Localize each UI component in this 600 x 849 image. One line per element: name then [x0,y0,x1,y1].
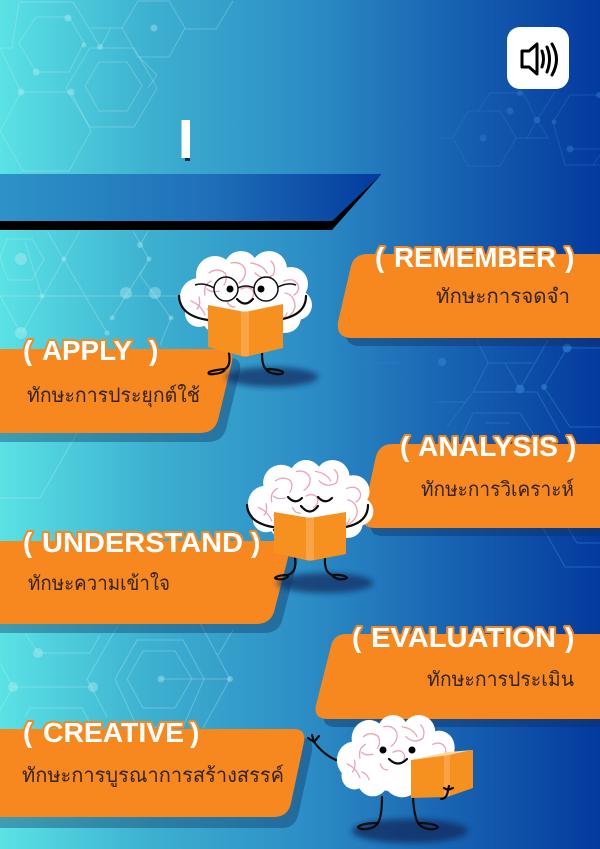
description: creative: ทักษะการบูรณาการสร้างสรรค์ [22,764,284,788]
heading: understand: UNDERSTAND [42,527,243,558]
description: evaluation: ทักษะการประเมิน [427,669,574,691]
heading: analysis: ) [567,431,576,462]
heading: analysis: ANALYSIS [418,431,558,462]
heading: remember: REMEMBER [394,242,556,273]
title band [0,174,382,230]
title cursor [182,120,190,161]
hexagon pattern: right middle [340,340,600,567]
panel: remember [338,254,600,346]
panel: evaluation [316,634,600,727]
heading: analysis: ( [400,431,410,462]
heading: apply: APPLY [42,335,132,366]
panel: creative [0,729,312,828]
heading: apply: ( [23,335,33,366]
description: analysis: ทักษะการวิเคราะห์ [421,478,574,501]
panel: analysis [363,444,600,536]
description: understand: ทักษะความเข้าใจ [28,572,170,595]
heading: understand: ) [251,527,260,558]
hexagon pattern: top left [0,1,233,171]
hexagon pattern: bottom left [0,623,233,728]
heading: evaluation: EVALUATION [371,622,556,653]
heading: remember: ) [565,242,574,273]
brain character waving [308,715,473,843]
heading: creative: ) [190,717,199,748]
icon: speaker [522,44,556,75]
hexagon pattern: top right [440,90,600,166]
heading: creative: CREATIVE [43,717,184,748]
speaker button [507,27,569,89]
hexagon pattern: left middle [0,231,178,498]
heading: evaluation: ) [565,622,574,653]
heading: evaluation: ( [352,622,362,653]
brain character with glasses [179,251,318,387]
panel: understand [0,541,298,633]
brain character with closed eyes [247,460,373,593]
description: apply: ทักษะการประยุกต์ใช้ [27,384,200,408]
heading: apply: ) [149,335,158,366]
heading: creative: ( [23,717,33,748]
heading: remember: ( [375,242,385,273]
panel: apply [0,349,240,442]
description: remember: ทักษะการจดจำ [436,286,570,308]
heading: understand: ( [23,527,33,558]
